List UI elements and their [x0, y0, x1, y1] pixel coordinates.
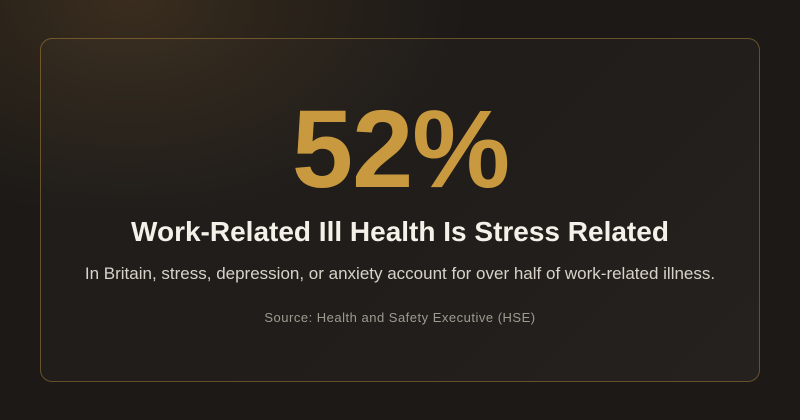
source note: Source: Health and Safety Executive (HSE) [264, 310, 536, 325]
heading: Work-Related Ill Health Is Stress Related [131, 216, 669, 247]
description text: In Britain, stress, depression, or anxiety account for over half of work-related illness. [85, 264, 715, 283]
big number: 52%: 52% [292, 88, 509, 211]
panel: stat card [40, 38, 760, 382]
